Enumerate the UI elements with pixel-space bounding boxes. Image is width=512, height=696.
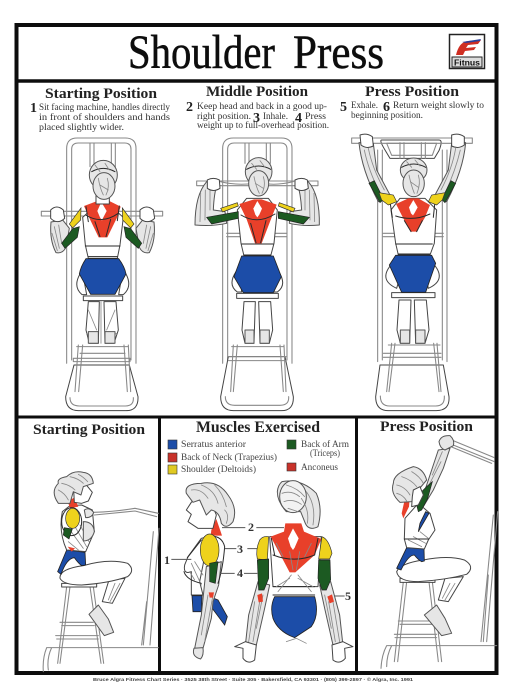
icon: Fitnus logo: Fitnus [454,58,481,68]
steps 5 and 6 instructions: Exhale. [351,100,378,110]
heading: middle position: Middle Position [206,84,309,100]
heading: bottom press position: Press Position [380,419,474,435]
steps 2 to 4 instructions: 3 [253,111,260,126]
steps 2 to 4 instructions: 4 [295,111,302,126]
figure: starting position, side view [43,472,159,672]
heading: starting position: Starting Position [45,86,158,102]
callout numbers: 3 [237,542,243,556]
figure: muscles, side view [171,483,245,659]
icon: Fitnus logo [450,34,484,68]
figure: starting position, back view on machine [41,138,163,411]
heading: press position: Press Position [365,84,460,100]
step 1 instructions: Sit facing machine, handles directly [39,102,170,112]
callout numbers [164,520,351,603]
figure: press position, back view on machine [352,134,472,411]
legend [168,439,350,475]
figure: middle position, back view on machine [195,138,319,411]
steps 5 and 6 instructions: 6 [383,100,390,115]
legend: Anconeus [301,463,338,473]
steps 2 to 4 instructions: weight up to full-overhead position. [197,120,329,130]
figure: muscles, back view [235,481,353,662]
legend: Back of Arm [301,439,350,450]
steps 5 and 6 instructions: beginning position. [351,110,423,120]
steps 2 to 4 instructions: 2 [186,100,193,115]
title: Shoulder [128,26,275,79]
steps 5 and 6 instructions [340,100,485,120]
step 1 instructions: placed slightly wider. [39,122,124,132]
heading: bottom starting position: Starting Position [33,422,146,438]
step 1 instructions [30,101,171,132]
callout numbers: 4 [237,566,243,580]
figure: press position, side view [381,436,498,668]
steps 5 and 6 instructions: 5 [340,100,347,115]
title [128,26,384,79]
steps 2 to 4 instructions [186,100,329,130]
legend: Shoulder (Deltoids) [181,464,256,475]
callout numbers: 1 [164,553,170,567]
steps 2 to 4 instructions: Inhale. [263,111,288,121]
heading: muscles exercised: Muscles Exercised [196,419,320,436]
steps 5 and 6 instructions: Return weight slowly to [393,100,485,110]
legend: Serratus anterior [181,440,247,450]
title: Press [293,26,384,79]
steps 2 to 4 instructions: right position. [197,111,251,121]
footer credit line: Bruce Algra Fitness Chart Series · 3525 38th Street · Suite 305 · Bakersfield, CA 93301 · (805) 399-2897 · © Algra, Inc. 1991 [93,676,414,682]
steps 2 to 4 instructions: Press [305,111,327,121]
steps 2 to 4 instructions: Keep head and back in a good up- [197,101,327,111]
step 1 instructions: in front of shoulders and hands [39,112,171,122]
legend: Back of Neck (Trapezius) [181,452,277,463]
callout numbers: 2 [248,520,254,534]
step 1 instructions: 1 [30,101,37,116]
legend: (Triceps) [310,448,340,459]
callout numbers: 5 [345,589,351,603]
